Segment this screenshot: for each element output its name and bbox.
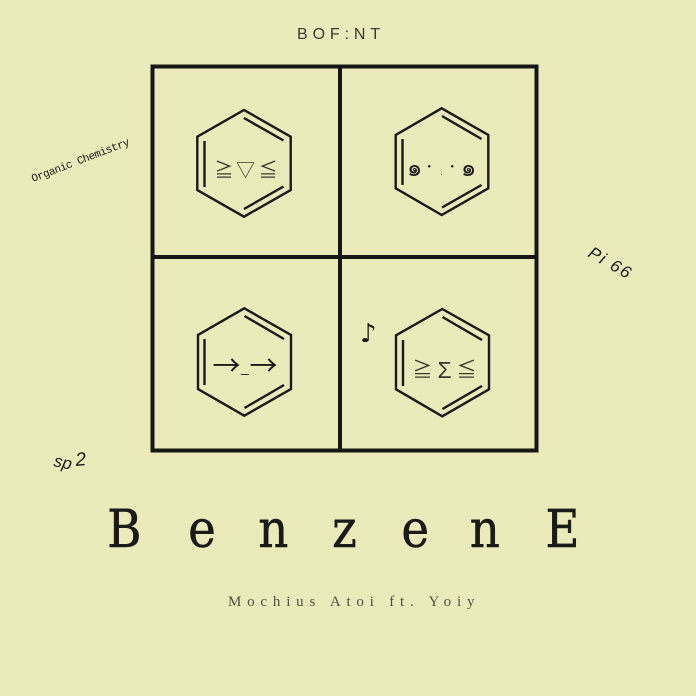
grid of four panels [152, 66, 536, 450]
face: top-right: . [440, 169, 443, 177]
panel: top-right benzene face [396, 108, 488, 215]
face: top-right: ๑ [461, 154, 476, 182]
icon: hexagon ring bottom-left [198, 308, 291, 416]
icon: hexagon ring bottom-right [396, 309, 489, 416]
face: bottom-right: Σ [438, 357, 452, 383]
face: bottom-left: →→ [212, 344, 278, 384]
label: sp2 [52, 449, 87, 474]
title: BenzenE [107, 499, 580, 560]
label: sp2: sp [52, 451, 74, 474]
face: bottom-left: _ [240, 359, 249, 375]
face: top-right [407, 154, 476, 182]
icon: hexagon ring top-left [197, 110, 291, 217]
panel: bottom-right benzene face [396, 309, 489, 416]
face: top-right: ･ [426, 158, 433, 176]
face: top-right: ･ [448, 158, 456, 176]
panel: bottom-left benzene face [198, 308, 291, 416]
top label: BOF:NT [297, 26, 385, 43]
face: top-right: ๑ [407, 154, 422, 182]
icon: music note: ♪ [360, 319, 377, 349]
artist credit: Mochius Atoi ft. Yoiy [228, 594, 480, 610]
panel: top-left benzene face [197, 110, 291, 217]
face: top-left: ≧▽≦ [214, 160, 278, 182]
label: organic chemistry: Organic Chemistry [30, 137, 132, 186]
icon: hexagon ring top-right [396, 108, 488, 215]
label: sp2: 2 [74, 449, 87, 471]
label: pi 66: Pi 66 [585, 243, 636, 283]
face: bottom-right: ≧≦ [412, 358, 476, 382]
